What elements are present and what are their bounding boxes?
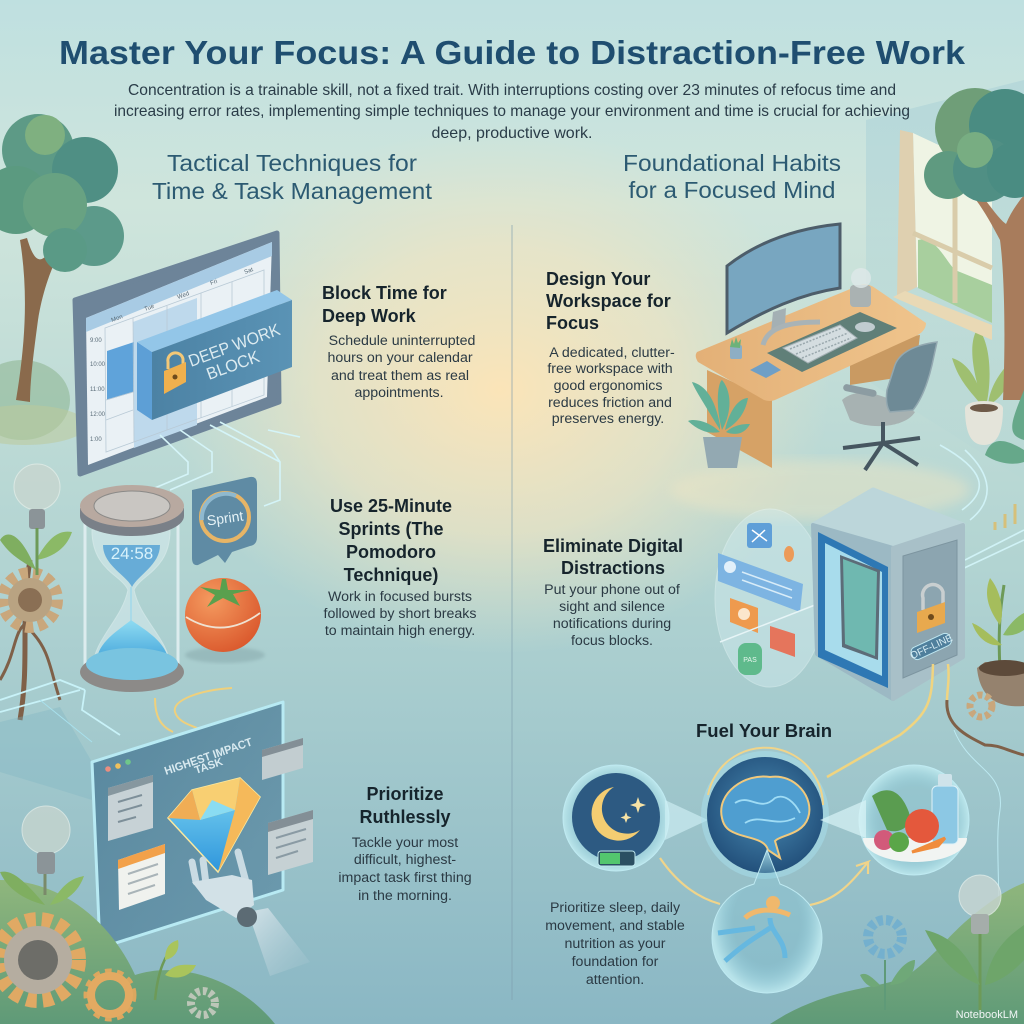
text block: fuel your brain: nutrition as your	[565, 936, 666, 952]
icon: water bottle	[932, 774, 958, 844]
text block: block time	[322, 283, 475, 401]
text block: block time: and treat them as real	[331, 368, 469, 384]
illustration: calendar tablet with deep work block: Mon	[111, 314, 124, 324]
illustration: hourglass timer	[80, 485, 184, 692]
illustration: left tree	[0, 114, 124, 445]
icon: red x	[770, 626, 795, 657]
illustration: calendar tablet with deep work block: DEEP WORK	[186, 320, 283, 371]
illustration: left lightbulb plant and gear	[0, 464, 72, 720]
smart speaker	[850, 268, 871, 307]
text block: digital distractions: notifications during	[553, 616, 671, 632]
keyboard and mat	[767, 312, 897, 372]
text block: digital distractions: Distractions	[561, 558, 665, 578]
icon: tomato timer	[185, 578, 265, 663]
icon: battery	[598, 851, 635, 866]
icon: orange gear	[88, 973, 132, 1017]
text block: sprints: Use 25-Minute	[330, 496, 452, 516]
sleep bubble	[563, 765, 669, 871]
left section heading	[152, 150, 432, 204]
text block: digital distractions: focus blocks.	[571, 633, 653, 649]
text block: prioritize: Ruthlessly	[359, 807, 451, 827]
text block: workspace: reduces friction and	[548, 395, 672, 411]
illustration: calendar tablet with deep work block: Fri	[210, 279, 218, 287]
illustration: calendar tablet with deep work block	[75, 233, 292, 474]
text block: fuel your brain: attention.	[586, 972, 644, 988]
text block: fuel your brain: movement, and stable	[545, 918, 685, 934]
panel: highest impact task	[92, 702, 313, 976]
icon: brain	[721, 776, 809, 858]
text block: sprints: followed by short breaks	[324, 606, 476, 622]
label: off-line: OFF-LINE	[909, 633, 955, 662]
illustration: notification bubble	[715, 509, 825, 687]
NotebookLM badge: NotebookLM	[956, 1009, 1018, 1021]
chair	[842, 342, 937, 470]
text block: prioritize: difficult, highest-	[354, 852, 456, 868]
right section heading	[623, 150, 841, 203]
text block: block time: Schedule uninterrupted	[329, 333, 475, 349]
text block: sprints: Work in focused bursts	[328, 589, 472, 605]
right section heading: Foundational Habits	[623, 150, 841, 176]
text block: digital distractions: Put your phone out of	[544, 582, 680, 598]
text block: block time: Block Time for	[322, 283, 447, 303]
circuit lines: upper left	[150, 422, 300, 506]
circuit lines: upper right	[940, 445, 1024, 570]
text block: prioritize	[338, 784, 472, 904]
text block: prioritize: Tackle your most	[352, 835, 458, 851]
text block: workspace	[546, 269, 675, 427]
text block: prioritize: Prioritize	[366, 784, 444, 804]
icon: small grey gear	[191, 991, 215, 1015]
plant in pot	[688, 380, 750, 468]
heading: fuel your brain: Fuel Your Brain	[696, 720, 832, 741]
card: lower right	[268, 810, 313, 875]
text block: prioritize: in the morning.	[358, 888, 452, 904]
text block: sprints: Pomodoro	[346, 542, 436, 562]
text block: workspace: good ergonomics	[554, 378, 662, 394]
icon: safe lock	[917, 585, 945, 633]
icon: orange bell	[730, 598, 758, 633]
text block: block time: Deep Work	[322, 306, 417, 326]
icon: green badge: PAS	[743, 657, 757, 664]
illustration: calendar tablet with deep work block: 12:00	[90, 412, 106, 418]
card: orange	[118, 844, 165, 910]
text block: workspace: Workspace for	[546, 291, 671, 311]
illustration: window and right tree	[893, 88, 1024, 464]
text block: digital distractions: Eliminate Digital	[543, 536, 683, 556]
intro text: Concentration is a trainable skill, not a fixed trait. With interruptions costing over 23 minutes of refocus time and	[128, 82, 896, 99]
runner bubble	[712, 850, 822, 993]
food bubble	[859, 765, 969, 875]
illustration: phone safe	[813, 490, 963, 699]
panel: highest impact task: HIGHEST IMPACT	[163, 737, 254, 778]
text block: sprints	[324, 496, 476, 639]
illustration: calendar tablet with deep work block: 9:00	[90, 338, 102, 344]
title: Master Your Focus: A Guide to Distraction-Free Work	[59, 34, 966, 71]
text block: workspace: A dedicated, clutter-	[549, 345, 675, 361]
illustration: hourglass timer: 24:58	[111, 544, 153, 563]
illustration: lower right hill and bulb	[770, 875, 1024, 1024]
panel: highest impact task: TASK	[193, 756, 225, 777]
card: top right	[262, 738, 303, 780]
illustration: calendar tablet with deep work block: 11:00	[90, 387, 105, 393]
text block: workspace: Focus	[546, 313, 599, 333]
illustration: right side plant and gear	[947, 578, 1024, 1000]
text block: digital distractions	[543, 536, 683, 649]
text block: digital distractions: sight and silence	[559, 599, 665, 615]
intro text	[114, 82, 910, 142]
text block: sprints: Technique)	[344, 565, 438, 585]
right section heading: for a Focused Mind	[628, 177, 836, 203]
left section heading: Time & Task Management	[152, 178, 432, 204]
icon: robot hand and arm	[192, 852, 310, 976]
text block: fuel your brain: foundation for	[572, 954, 659, 970]
icon: green badge	[738, 643, 762, 675]
icon: padlock	[164, 353, 186, 394]
illustration: lower left hill, gears, bulb	[0, 806, 275, 1024]
illustration: calendar tablet with deep work block: Sat	[244, 267, 254, 276]
icon: sprint speech bubble	[192, 477, 257, 565]
illustration: calendar tablet with deep work block: BLOCK	[204, 347, 263, 384]
illustration: desk workspace	[670, 224, 1012, 520]
text block: fuel your brain	[545, 900, 685, 988]
illustration: calendar tablet with deep work block: 10:00	[90, 362, 106, 368]
icon: orange dot	[784, 546, 794, 562]
illustration: calendar tablet with deep work block: 1:00	[90, 437, 102, 443]
text block: prioritize: impact task first thing	[338, 870, 472, 886]
text block: workspace: preserves energy.	[552, 411, 664, 427]
intro text: deep, productive work.	[432, 125, 592, 142]
text block: block time: appointments.	[354, 385, 444, 401]
icon: sprint speech bubble: Sprint	[206, 508, 244, 528]
icon: diamond	[168, 778, 260, 872]
text block: workspace: Design Your	[546, 269, 650, 289]
diagram: brain hub	[563, 748, 969, 993]
right potted plant	[952, 328, 1012, 445]
connector: safe to brain	[827, 664, 949, 777]
illustration: calendar tablet with deep work block: Tue	[144, 304, 156, 313]
intro text: increasing error rates, implementing simple techniques to manage your environment and time is crucial for achieving	[114, 103, 910, 120]
card: left grey	[108, 775, 153, 841]
icon: phone	[840, 555, 880, 660]
text block: block time: hours on your calendar	[327, 350, 473, 366]
text block: fuel your brain: Prioritize sleep, daily	[550, 900, 681, 916]
left section heading: Tactical Techniques for	[167, 150, 417, 176]
monitor	[727, 224, 840, 345]
text block: sprints: Sprints (The	[338, 519, 444, 539]
connector lines: to task panel	[0, 680, 232, 800]
illustration: calendar tablet with deep work block: Wed	[177, 291, 190, 301]
icon: mail	[747, 523, 772, 548]
text block: workspace: free workspace with	[547, 361, 673, 377]
text block: sprints: to maintain high energy.	[325, 623, 475, 639]
icon: notification message	[718, 553, 803, 612]
icon: large gear	[0, 920, 78, 1000]
